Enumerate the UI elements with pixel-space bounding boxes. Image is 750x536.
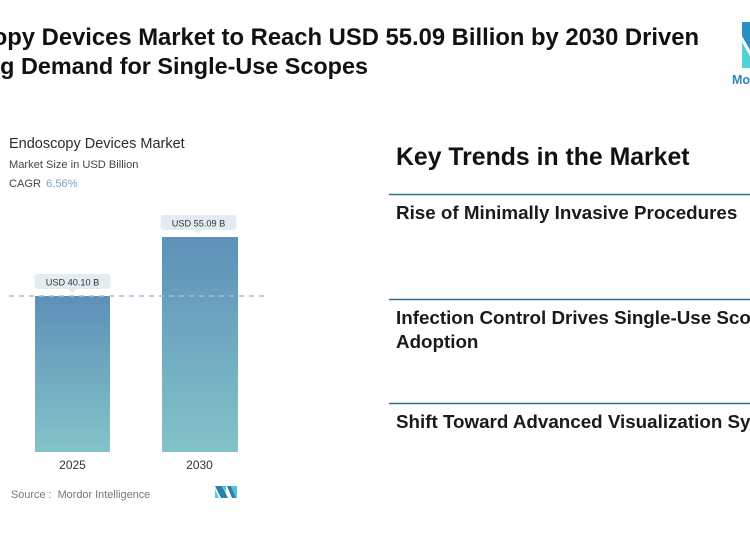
chart heading <box>9 136 185 190</box>
panel: market size chart <box>9 136 265 501</box>
panel: key trends <box>389 144 750 432</box>
chart heading: CAGR 6.56% <box>9 178 78 190</box>
trend 1: Rise of Minimally Invasive Procedures <box>396 202 737 223</box>
trend 2 <box>389 300 750 352</box>
source note: Source : Mordor Intelligence <box>11 489 150 501</box>
value label 2025: USD 40.10 B <box>46 278 99 288</box>
value label 2030 <box>160 215 236 234</box>
axis label 2025: 2025 <box>59 458 86 472</box>
icon: Mordor Intelligence small logo <box>215 486 237 498</box>
value label 2025 <box>34 274 110 292</box>
dashed reference line <box>9 295 265 297</box>
title <box>0 24 699 79</box>
icon: Mordor Intelligence header logo <box>732 22 750 87</box>
trend 2: Adoption <box>396 331 478 352</box>
bar 2030 <box>162 237 238 452</box>
axis label 2030: 2030 <box>186 458 213 472</box>
value label 2030: USD 55.09 B <box>172 218 225 228</box>
chart heading: Endoscopy Devices Market <box>9 136 185 152</box>
bar 2025 <box>35 296 110 452</box>
key trends heading: Key Trends in the Market <box>396 144 690 171</box>
chart heading: Market Size in USD Billion <box>9 159 138 171</box>
